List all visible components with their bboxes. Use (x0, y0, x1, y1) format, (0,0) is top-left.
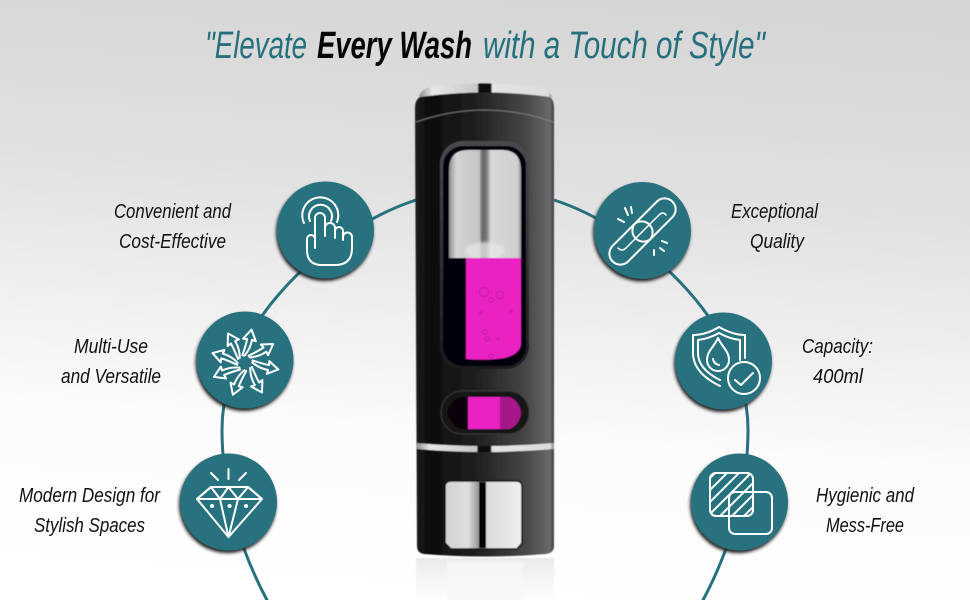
badge (675, 312, 772, 410)
label: Multi-Use (74, 336, 148, 358)
label (114, 201, 232, 253)
label: Modern Design for (19, 485, 161, 507)
icon: diamond (197, 469, 262, 537)
feature: Convenient and Cost-Effective (114, 182, 374, 281)
feature: Hygienic and Mess-Free (690, 454, 915, 553)
label: 400ml (813, 366, 864, 388)
badge (594, 182, 691, 279)
icon: overlapping squares (709, 472, 773, 535)
badge (691, 454, 788, 550)
icon: chain link (605, 194, 680, 269)
icon: shield with drop and check (693, 327, 760, 394)
label: Capacity: (802, 336, 873, 358)
badge (277, 182, 374, 278)
icon: radiating arrows (211, 328, 280, 397)
badge shadow (690, 456, 787, 553)
label (816, 485, 915, 537)
chrome band (416, 443, 554, 452)
badge (180, 454, 277, 550)
title: with a Touch of Style" (483, 25, 766, 67)
small window (441, 391, 529, 434)
title (205, 25, 766, 67)
feature: Multi-Use and Versatile (61, 312, 294, 411)
badge (196, 312, 294, 408)
feature: Exceptional Quality (593, 182, 818, 282)
badge shadow (276, 184, 373, 281)
bubbles (480, 288, 512, 358)
product: soap dispenser (415, 84, 554, 600)
label: Quality (750, 231, 805, 253)
label (731, 201, 818, 253)
label (61, 336, 161, 388)
glass highlight (465, 242, 505, 260)
body (415, 92, 554, 556)
label: Hygienic and (816, 485, 915, 507)
chrome cap (419, 84, 552, 97)
connecting arc: left (222, 200, 416, 600)
icon: tapping hand (302, 197, 352, 265)
push button (445, 481, 522, 549)
feature: Capacity 400ml (674, 312, 873, 412)
cap seam (416, 110, 553, 122)
label: Mess-Free (826, 515, 904, 537)
label (19, 485, 161, 537)
label: Convenient and (114, 201, 232, 223)
label (802, 336, 873, 388)
connecting arc: right (554, 200, 748, 600)
badge shadow (196, 314, 292, 411)
label: Stylish Spaces (34, 515, 145, 537)
title: Every Wash (317, 25, 472, 67)
label: Exceptional (731, 201, 818, 223)
pink liquid (466, 258, 521, 360)
badge shadow (593, 184, 690, 282)
title: "Elevate (205, 25, 307, 67)
label: Cost-Effective (119, 231, 226, 253)
main window (440, 141, 529, 369)
glass (449, 150, 521, 258)
feature: Modern Design for Stylish Spaces (19, 454, 277, 553)
badge shadow (674, 315, 771, 412)
reflection (416, 558, 554, 600)
badge shadow (179, 456, 276, 553)
label: and Versatile (61, 366, 161, 388)
